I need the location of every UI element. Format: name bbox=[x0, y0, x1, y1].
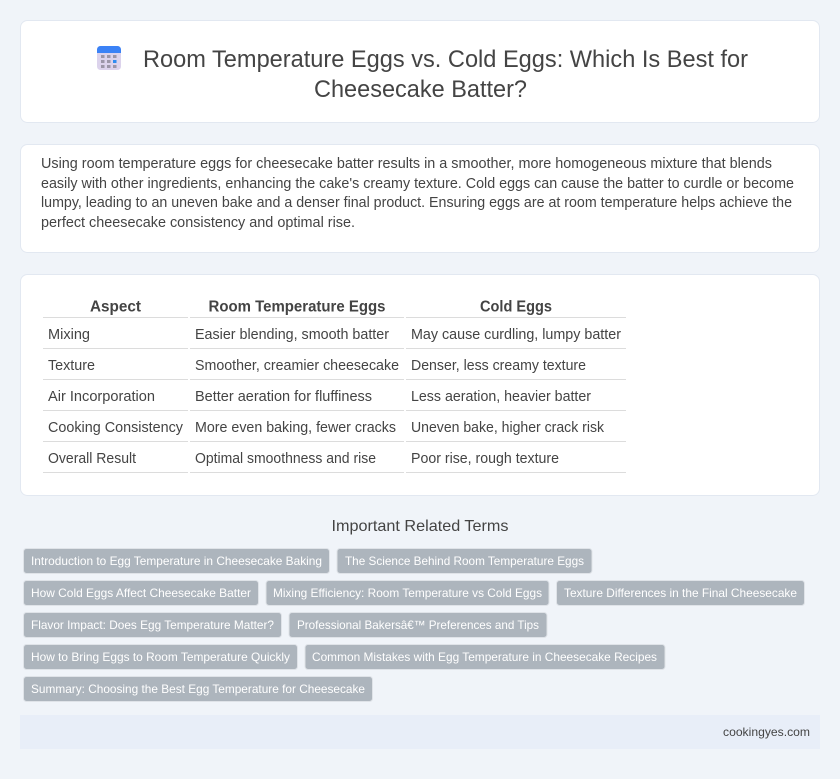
table row: texture: Denser, less creamy texture bbox=[411, 358, 586, 374]
text block: summary: easily with other ingredients, enhancing the cake's creamy texture. Cold eggs can cause the batter to curdle or become bbox=[41, 176, 794, 192]
table header: Room Temperature Eggs bbox=[208, 298, 386, 316]
title: Room Temperature Eggs vs. Cold Eggs: Which Is Best for bbox=[143, 46, 748, 73]
tag: How Cold Eggs Affect Cheesecake Batter bbox=[31, 586, 251, 600]
panel: summary paragraph bbox=[20, 144, 820, 252]
tag bbox=[24, 580, 258, 606]
tag bbox=[556, 580, 804, 606]
table header: Cold Eggs bbox=[480, 298, 552, 316]
title bbox=[143, 46, 748, 103]
table row: air incorporation: Less aeration, heavier batter bbox=[411, 389, 591, 405]
tag bbox=[24, 612, 282, 638]
table row: texture: Smoother, creamier cheesecake bbox=[195, 358, 399, 374]
footer source text: cookingyes.com bbox=[723, 725, 810, 739]
text block: summary: perfect cheesecake consistency and optimal rise. bbox=[41, 215, 355, 231]
heading: important related terms: Important Related Terms bbox=[332, 518, 508, 535]
table row: air incorporation: Better aeration for fluffiness bbox=[195, 389, 372, 405]
related term tags bbox=[24, 548, 804, 702]
table row: mixing: Mixing bbox=[48, 327, 90, 343]
tag: Flavor Impact: Does Egg Temperature Matter? bbox=[31, 618, 274, 632]
panel: comparison table bbox=[20, 274, 820, 496]
table row: overall result: Optimal smoothness and rise bbox=[195, 451, 376, 467]
tag: How to Bring Eggs to Room Temperature Quickly bbox=[31, 650, 290, 664]
table row: overall result: Poor rise, rough texture bbox=[411, 451, 559, 467]
table row: mixing: Easier blending, smooth batter bbox=[195, 327, 389, 343]
icon: calendar bbox=[97, 46, 121, 70]
text block: summary: lumpy, leading to an uneven bake and a denser final product. Ensuring eggs are at room temperature helps achieve the bbox=[41, 195, 792, 211]
tag: Professional Bakersâ€™ Preferences and Tips bbox=[297, 618, 539, 632]
footer bar bbox=[20, 715, 820, 749]
tag bbox=[289, 612, 547, 638]
table row: cooking consistency bbox=[48, 420, 605, 436]
tag: Introduction to Egg Temperature in Cheesecake Baking bbox=[31, 554, 322, 568]
table header bbox=[90, 298, 552, 316]
tag: Texture Differences in the Final Cheesecake bbox=[564, 586, 797, 600]
tag: Common Mistakes with Egg Temperature in Cheesecake Recipes bbox=[312, 650, 657, 664]
tag bbox=[337, 548, 592, 574]
text block: summary bbox=[41, 156, 794, 231]
tag: Mixing Efficiency: Room Temperature vs Cold Eggs bbox=[273, 586, 542, 600]
table row: mixing: May cause curdling, lumpy batter bbox=[411, 327, 621, 343]
tag bbox=[24, 644, 298, 670]
table row: overall result: Overall Result bbox=[48, 451, 136, 467]
tag bbox=[24, 676, 372, 702]
table row: mixing bbox=[48, 327, 621, 343]
table row: cooking consistency: Cooking Consistency bbox=[48, 420, 184, 436]
text block: summary: Using room temperature eggs for cheesecake batter results in a smoother, more homogeneous mixture that blends bbox=[41, 156, 772, 172]
table row: air incorporation: Air Incorporation bbox=[48, 389, 155, 405]
tag bbox=[305, 644, 665, 670]
title: Cheesecake Batter? bbox=[314, 76, 527, 103]
table row: overall result bbox=[48, 451, 559, 467]
table row: air incorporation bbox=[48, 389, 591, 405]
panel: title header bbox=[20, 20, 820, 122]
table row: texture: Texture bbox=[48, 358, 95, 374]
tag bbox=[266, 580, 549, 606]
tag: Summary: Choosing the Best Egg Temperature for Cheesecake bbox=[31, 682, 365, 696]
tag bbox=[24, 548, 330, 574]
table row: cooking consistency: More even baking, fewer cracks bbox=[195, 420, 396, 436]
table row: cooking consistency: Uneven bake, higher crack risk bbox=[411, 420, 605, 436]
table header: Aspect bbox=[90, 298, 142, 316]
tag: The Science Behind Room Temperature Eggs bbox=[345, 554, 584, 568]
table row: texture bbox=[48, 358, 586, 374]
